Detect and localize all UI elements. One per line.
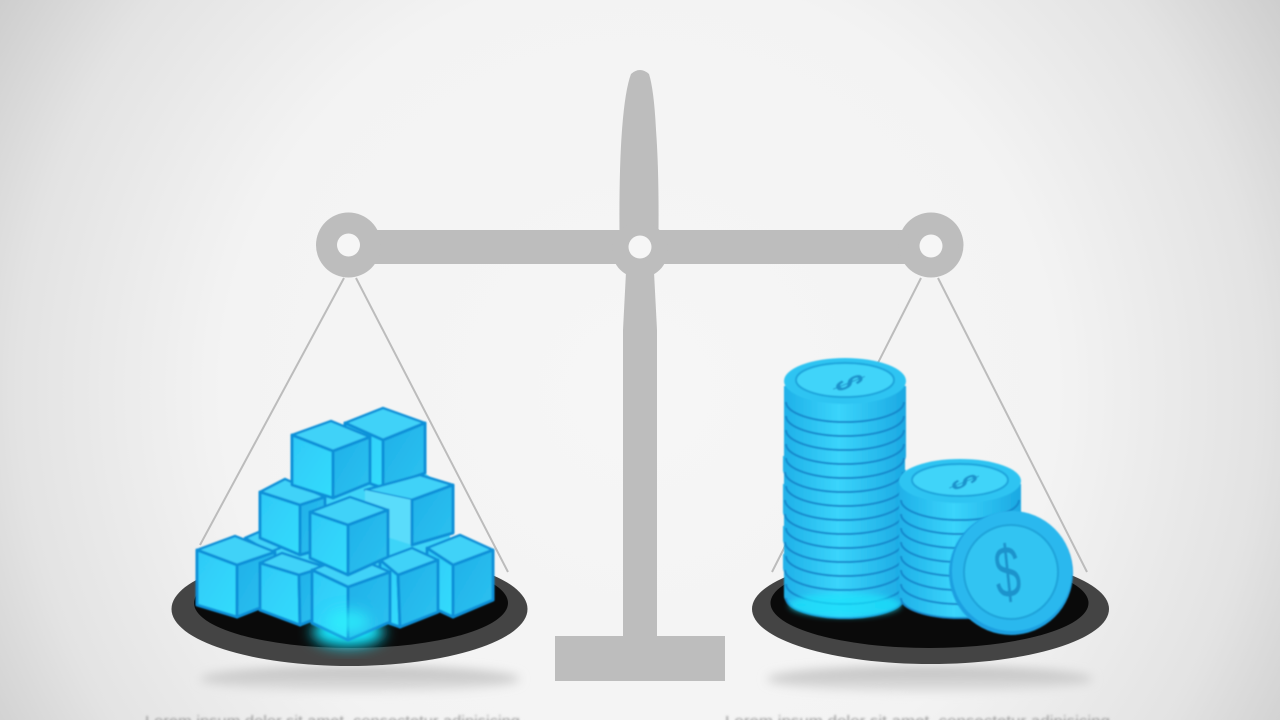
cube: front right: [380, 548, 438, 627]
base: [555, 636, 725, 681]
shadow: left pan: [200, 666, 520, 692]
cube: centre: [310, 497, 388, 575]
cube: front centre: [312, 555, 390, 640]
dollar sign: $: [990, 530, 1025, 615]
balance beam: [370, 230, 910, 264]
ring holes: [337, 234, 942, 258]
cube pile: [197, 408, 493, 647]
left ring: [316, 212, 381, 278]
tall coin stack: [783, 358, 906, 618]
dollar sign, tilted: $: [826, 369, 873, 396]
base glow: [789, 593, 901, 617]
cube: middle right: [365, 475, 453, 545]
cube: far right: [427, 535, 493, 617]
scale stand: [316, 70, 964, 681]
upper post: [619, 70, 659, 232]
top coin face: [899, 459, 1021, 503]
right pan: [752, 554, 1109, 664]
strings: [200, 278, 1087, 572]
top coin face: [784, 358, 906, 404]
dollar sign, tilted: $: [942, 470, 985, 495]
shadow: right pan: [767, 666, 1093, 692]
cube: far left: [197, 525, 300, 617]
cube: middle left: [260, 479, 325, 555]
cube: top front: [292, 421, 370, 498]
glow: [312, 617, 384, 647]
pile backing: [240, 470, 470, 630]
lower post: [623, 272, 657, 640]
left pan: [172, 552, 528, 666]
standing coin: [949, 511, 1073, 635]
cube glow: [326, 610, 370, 634]
centre knob: [612, 222, 668, 278]
cube: second left: [260, 553, 325, 625]
cube: top back: [345, 408, 425, 488]
short coin stack: [899, 459, 1021, 618]
right ring: [898, 212, 964, 278]
